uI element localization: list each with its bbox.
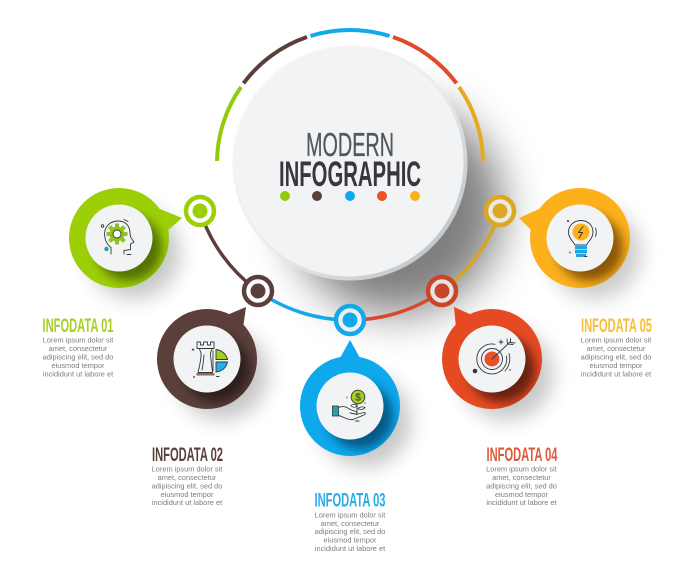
- text block: infodata 03: eiusmod tempor: [324, 536, 377, 544]
- text block: infodata 02: eiusmod tempor: [160, 490, 214, 499]
- title: MODERN: [306, 126, 394, 163]
- title: INFOGRAPHIC: [279, 155, 421, 194]
- icon: light bulb: [567, 220, 596, 257]
- text block: infodata 01: adipiscing elit, sed do: [43, 352, 113, 362]
- text block: infodata 03: INFODATA 03: [314, 490, 386, 512]
- text block: infodata 02: adipiscing elit, sed do: [152, 482, 222, 490]
- text block: infodata 01: incididunt ut labore et: [43, 370, 113, 378]
- text block: infodata 05: adipiscing elit, sed do: [581, 352, 651, 362]
- text block: infodata 04: [486, 444, 558, 507]
- text block: infodata 01: [42, 315, 114, 378]
- text block: infodata 04: incididunt ut labore et: [486, 498, 557, 507]
- badge 3: blue: [300, 340, 411, 467]
- text block: infodata 02: amet, consectetur: [158, 473, 217, 482]
- text block: infodata 04: amet, consectetur: [492, 473, 551, 482]
- text block: infodata 03: adipiscing elit, sed do: [315, 527, 385, 536]
- text block: infodata 03: [314, 490, 386, 553]
- node 4: [428, 277, 456, 305]
- badge 5: gold: [519, 188, 641, 299]
- badge 1: green: [69, 188, 182, 299]
- text block: infodata 05: amet, consectetur: [587, 344, 646, 353]
- text block: infodata 04: INFODATA 04: [486, 444, 558, 466]
- icon: chess rook with pie chart: [192, 342, 228, 378]
- text block: infodata 01: INFODATA 01: [42, 315, 114, 337]
- text block: infodata 02: INFODATA 02: [152, 444, 223, 466]
- lower connecting arc: [200, 211, 500, 320]
- badge 2: brown: [157, 307, 268, 420]
- icon: head with gear: [101, 220, 134, 254]
- text block: infodata 05: Lorem ipsum dolor sit: [581, 336, 651, 344]
- node 2: [244, 277, 272, 305]
- main circle: [232, 46, 468, 280]
- text block: infodata 05: incididunt ut labore et: [581, 370, 651, 378]
- title colour dots: [280, 191, 420, 201]
- text block: infodata 02: Lorem ipsum dolor sit: [152, 464, 222, 474]
- text block: infodata 03: Lorem ipsum dolor sit: [315, 510, 385, 520]
- node 3: [336, 306, 364, 334]
- badge 4: red: [442, 307, 553, 420]
- text block: infodata 03: amet, consectetur: [321, 519, 380, 528]
- text block: infodata 04: eiusmod tempor: [495, 490, 549, 499]
- text block: infodata 01: eiusmod tempor: [52, 361, 105, 370]
- text block: infodata 02: [152, 444, 223, 507]
- text block: infodata 03: incididunt ut labore et: [315, 544, 385, 553]
- text block: infodata 01: Lorem ipsum dolor sit: [43, 336, 113, 344]
- text block: infodata 01: amet, consectetur: [49, 344, 108, 353]
- text block: infodata 04: adipiscing elit, sed do: [486, 482, 557, 490]
- icon: hand with money plant: $: [355, 392, 361, 404]
- outer segmented arc: [217, 30, 483, 161]
- main circle shadow: [290, 102, 502, 314]
- title: [279, 126, 421, 194]
- node 1: [186, 197, 214, 225]
- text block: infodata 05: [581, 315, 652, 378]
- node 5: [486, 197, 514, 225]
- text block: infodata 05: eiusmod tempor: [590, 361, 643, 370]
- icon: target with arrow: [473, 338, 515, 374]
- text block: infodata 02: incididunt ut labore et: [152, 498, 222, 507]
- text block: infodata 04: Lorem ipsum dolor sit: [486, 464, 557, 474]
